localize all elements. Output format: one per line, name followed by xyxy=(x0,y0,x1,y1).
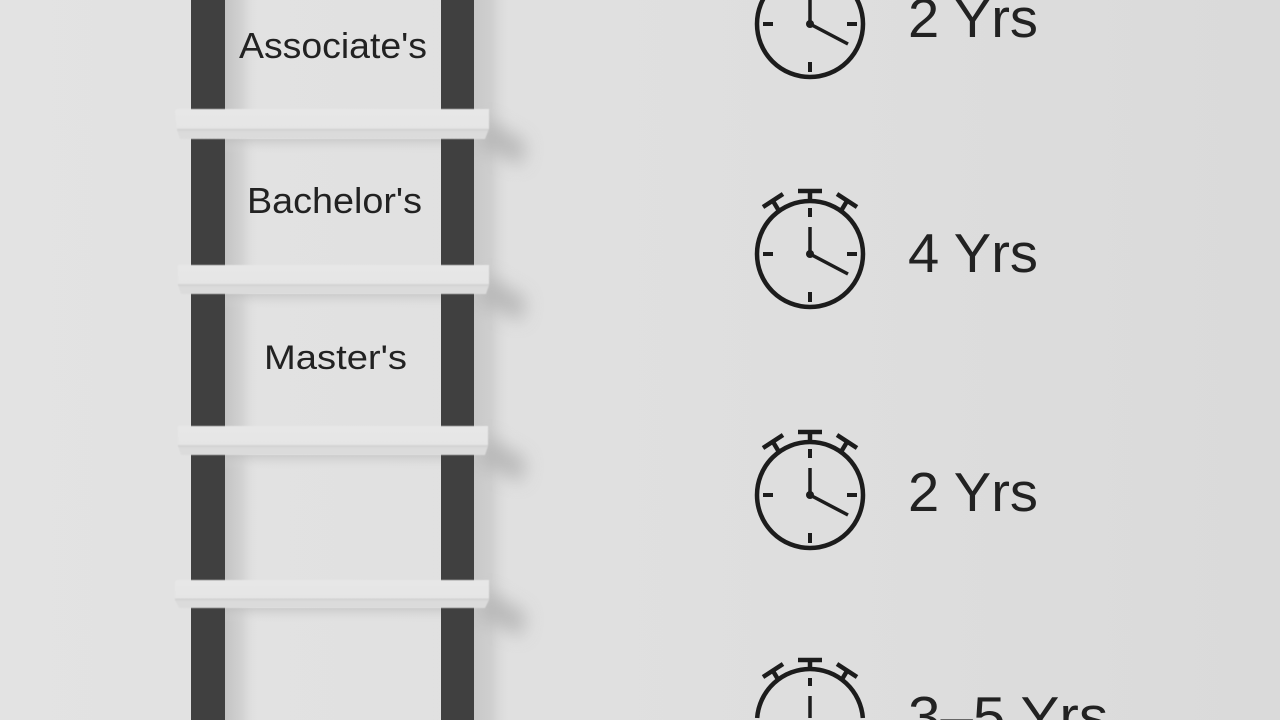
label: Bachelor's: Bachelor's xyxy=(247,180,422,221)
rung 2 xyxy=(178,265,489,294)
icon: stopwatch 2 years second xyxy=(757,432,863,548)
icon: stopwatch 2 years xyxy=(757,0,863,77)
duration: 4 Yrs: 4 Yrs xyxy=(908,222,1038,284)
ladder shadows xyxy=(225,0,526,720)
label: Master's: Master's xyxy=(264,339,407,377)
right rail xyxy=(441,0,474,720)
rung 1 xyxy=(175,109,489,139)
rung 4 xyxy=(175,580,489,608)
icon: stopwatch 4 years xyxy=(757,191,863,307)
icon: stopwatch 3-5 years xyxy=(757,660,863,718)
left rail xyxy=(191,0,225,720)
ladder xyxy=(175,0,526,720)
rung 3 xyxy=(178,426,488,455)
duration: 2 Yrs: 2 Yrs xyxy=(908,461,1038,523)
label: Associate's: Associate's xyxy=(239,25,427,66)
